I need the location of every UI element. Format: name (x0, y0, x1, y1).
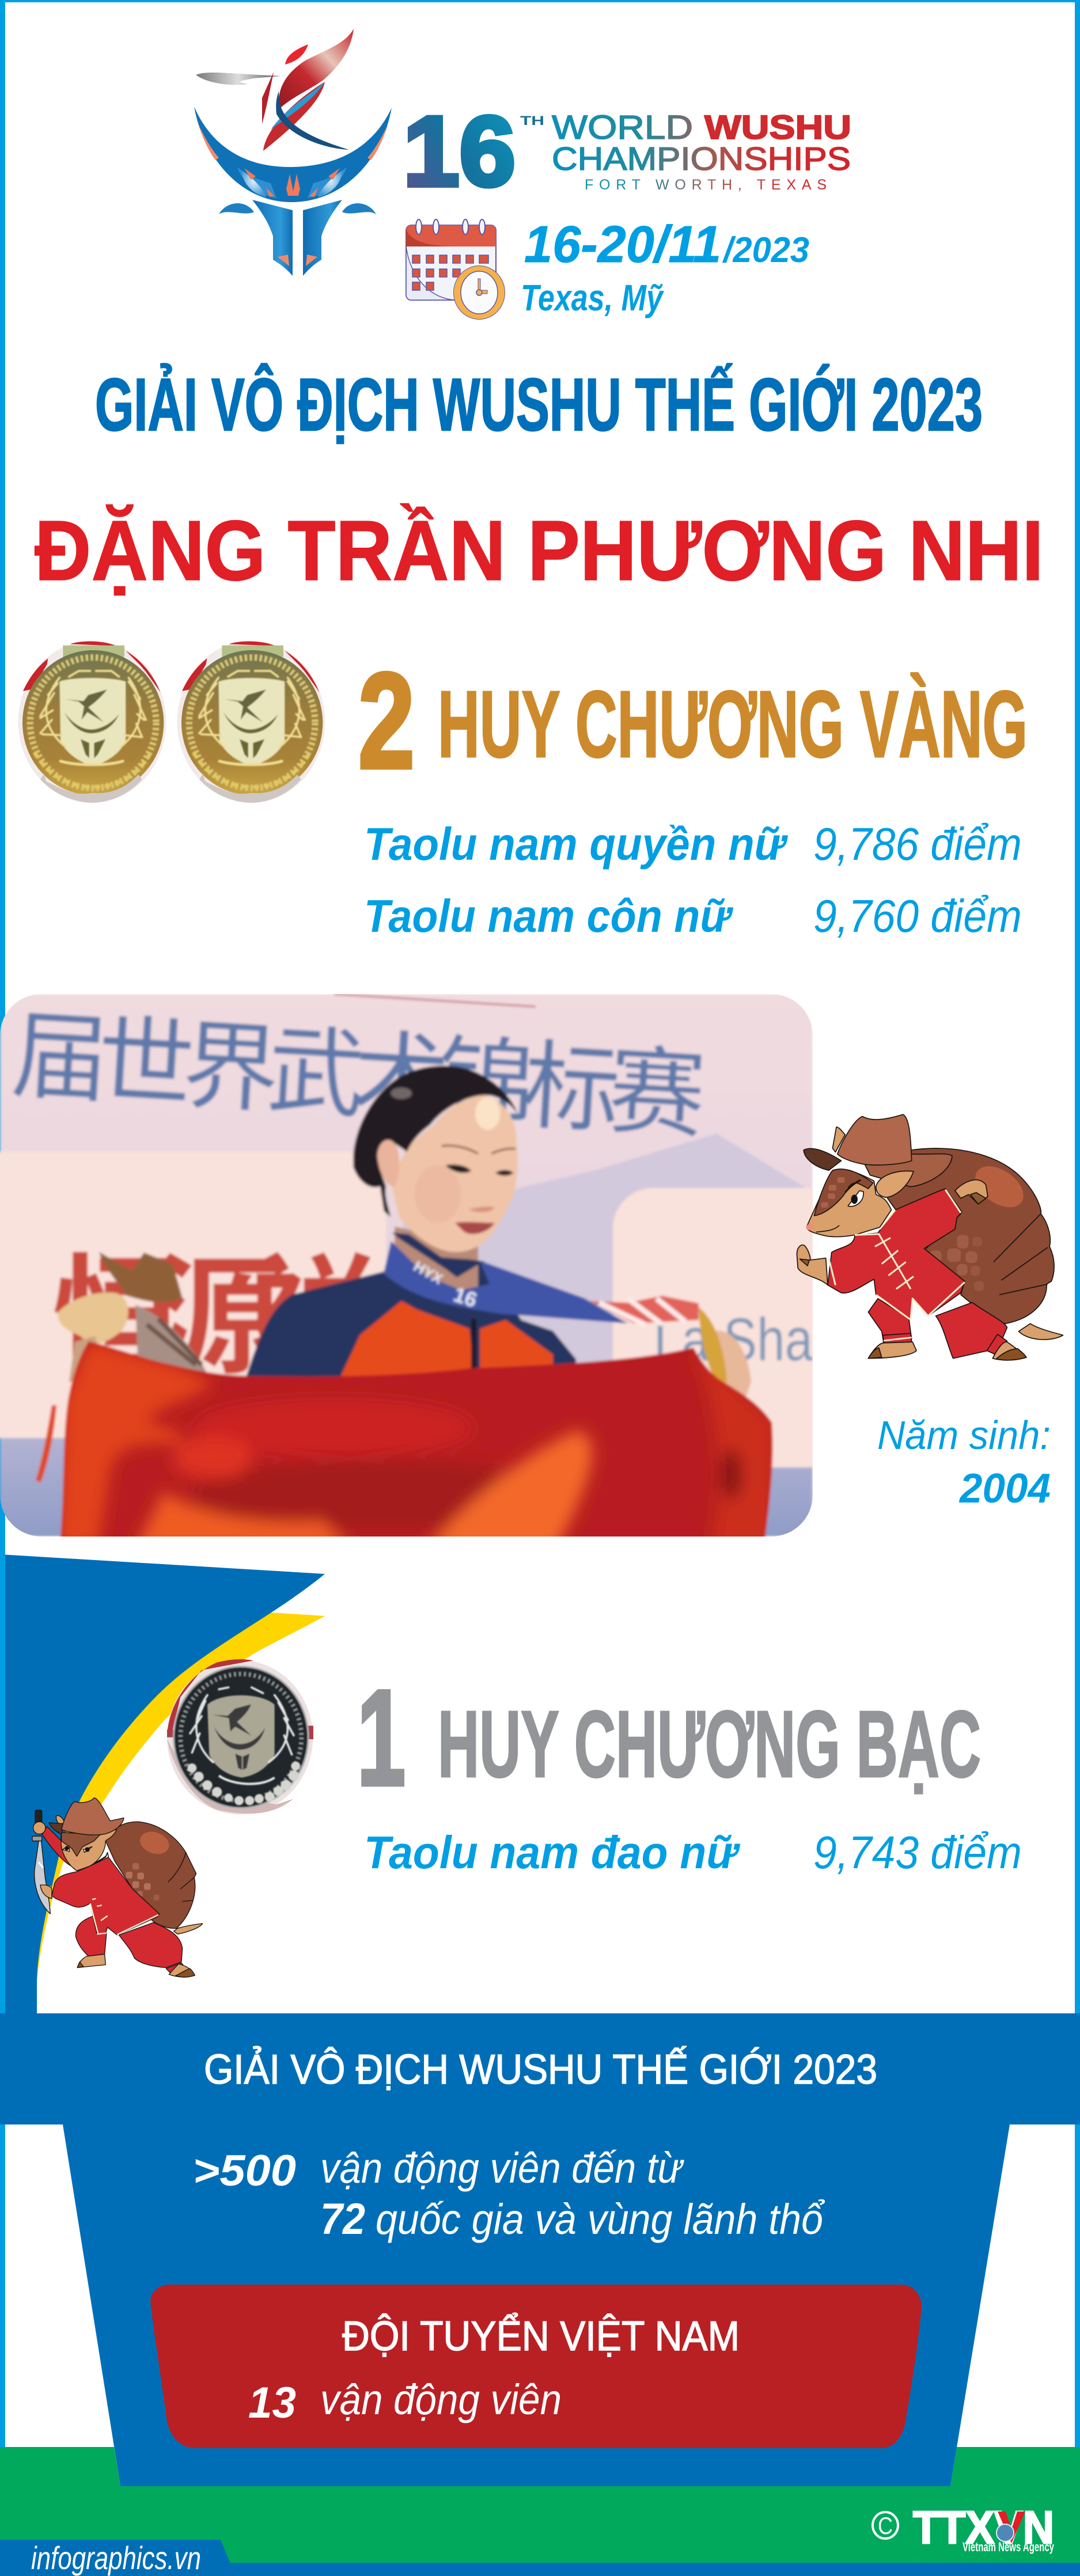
panel: Vietnam team: 13 (248, 2378, 296, 2427)
stat: athletes (193, 2144, 685, 2195)
athlete photo: 恒源祥 (52, 1245, 380, 1390)
athlete figure: 16 (451, 1283, 480, 1312)
event logo wordmark: WORLD (552, 109, 693, 146)
green footer (0, 2447, 1080, 2576)
panel: Vietnam team: vận động viên (320, 2376, 562, 2423)
score row: nam con (364, 890, 1022, 942)
flag (52, 1336, 783, 1549)
athlete figure (245, 1065, 699, 1382)
heading: 2 gold medals (358, 645, 1028, 797)
panel: Vietnam team: ĐỘI TUYỂN VIỆT NAM (342, 2313, 740, 2359)
event logo wordmark: 16 (403, 96, 516, 207)
silver medal (167, 1659, 313, 1815)
event logo wordmark (403, 96, 851, 207)
TTXVN logo: C (878, 2512, 893, 2539)
band heading: GIẢI VÔ ĐỊCH WUSHU THẾ GIỚI 2023 (204, 2046, 877, 2093)
score row: nam dao: Taolu nam đao nữ (364, 1827, 741, 1878)
blue info band (0, 2013, 1080, 2486)
championship emblem (194, 29, 392, 276)
athlete figure: HYX (411, 1257, 446, 1288)
heading: 1 silver medal (357, 1662, 981, 1814)
stat: athletes: >500 (193, 2146, 296, 2195)
event date and place: /2023 (722, 230, 809, 270)
decorative blue and yellow curve (0, 1554, 325, 2016)
athlete photo (0, 994, 855, 1549)
footer tab: infographics.vn (31, 2540, 201, 2576)
event date and place: Texas, Mỹ (521, 277, 665, 318)
birth year: Năm sinh: (877, 1413, 1051, 1458)
birth year (877, 1413, 1051, 1512)
heading: 1 silver medal: 1 (357, 1662, 406, 1814)
score row: nam dao: 9,743 điểm (813, 1827, 1022, 1878)
event logo wordmark: TH (520, 113, 544, 128)
score row: nam dao (364, 1827, 1022, 1878)
panel: Vietnam team (150, 2285, 922, 2448)
stat: countries: quốc gia và vùng lãnh thổ (376, 2195, 825, 2243)
heading: 2 gold medals: 2 (358, 645, 415, 797)
gold medal 1 (18, 641, 166, 803)
event logo wordmark: WUSHU (704, 109, 851, 146)
stat: countries: 72 (320, 2195, 365, 2244)
icon: calendar and clock (406, 219, 505, 320)
bottom blue strip (0, 2563, 1080, 2576)
birth year: 2004 (958, 1466, 1051, 1512)
mascot toy (58, 1252, 209, 1382)
event logo wordmark: CHAMPIONSHIPS (552, 141, 851, 177)
TTXVN logo: TTXVN (913, 2502, 1054, 2553)
score row: nam con: 9,760 điểm (813, 890, 1022, 942)
hand and gold medal (699, 1307, 751, 1405)
mascot: armadillo with sword (32, 1798, 203, 1977)
stat: athletes: vận động viên đến từ (320, 2144, 685, 2192)
flag cord (36, 1405, 56, 1483)
athlete photo: La Sha (654, 1306, 813, 1374)
score row: nam quyen (364, 818, 1022, 870)
event date and place: 16-20/11 (524, 216, 721, 274)
score row: nam quyen: 9,786 điểm (813, 818, 1022, 870)
event logo wordmark: FORT WORTH, TEXAS (585, 177, 827, 193)
score row: nam con: Taolu nam côn nữ (364, 890, 733, 942)
event date and place (521, 216, 809, 318)
athlete photo: 届世界武术锦标赛 (9, 1001, 708, 1150)
score row: nam quyen: Taolu nam quyền nữ (364, 818, 788, 870)
gold medal 2 (177, 641, 325, 803)
mascot: armadillo kung fu stance (797, 1114, 1063, 1360)
